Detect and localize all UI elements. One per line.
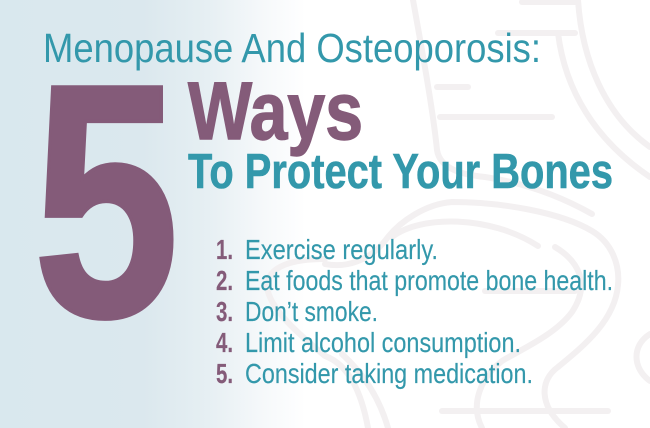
big numeral 5: 5 [33,16,179,387]
list item 1: Exercise regularly. [245,234,438,265]
title: Menopause And Osteoporosis: Menopause And Osteoporosis: [43,25,541,71]
list item 5: Consider taking medication. [245,358,533,389]
list item 5: 5. [216,358,233,389]
heading: Ways: Ways [188,66,363,157]
list item 4: Limit alcohol consumption. [245,327,521,358]
numbered list [216,234,613,389]
list item 2: 2. [216,265,233,296]
list item 4: 4. [216,327,233,358]
list item 1: 1. [216,234,233,265]
list item 3: Don’t smoke. [245,296,378,327]
background bone illustration [267,0,650,428]
list item 3: 3. [216,296,233,327]
